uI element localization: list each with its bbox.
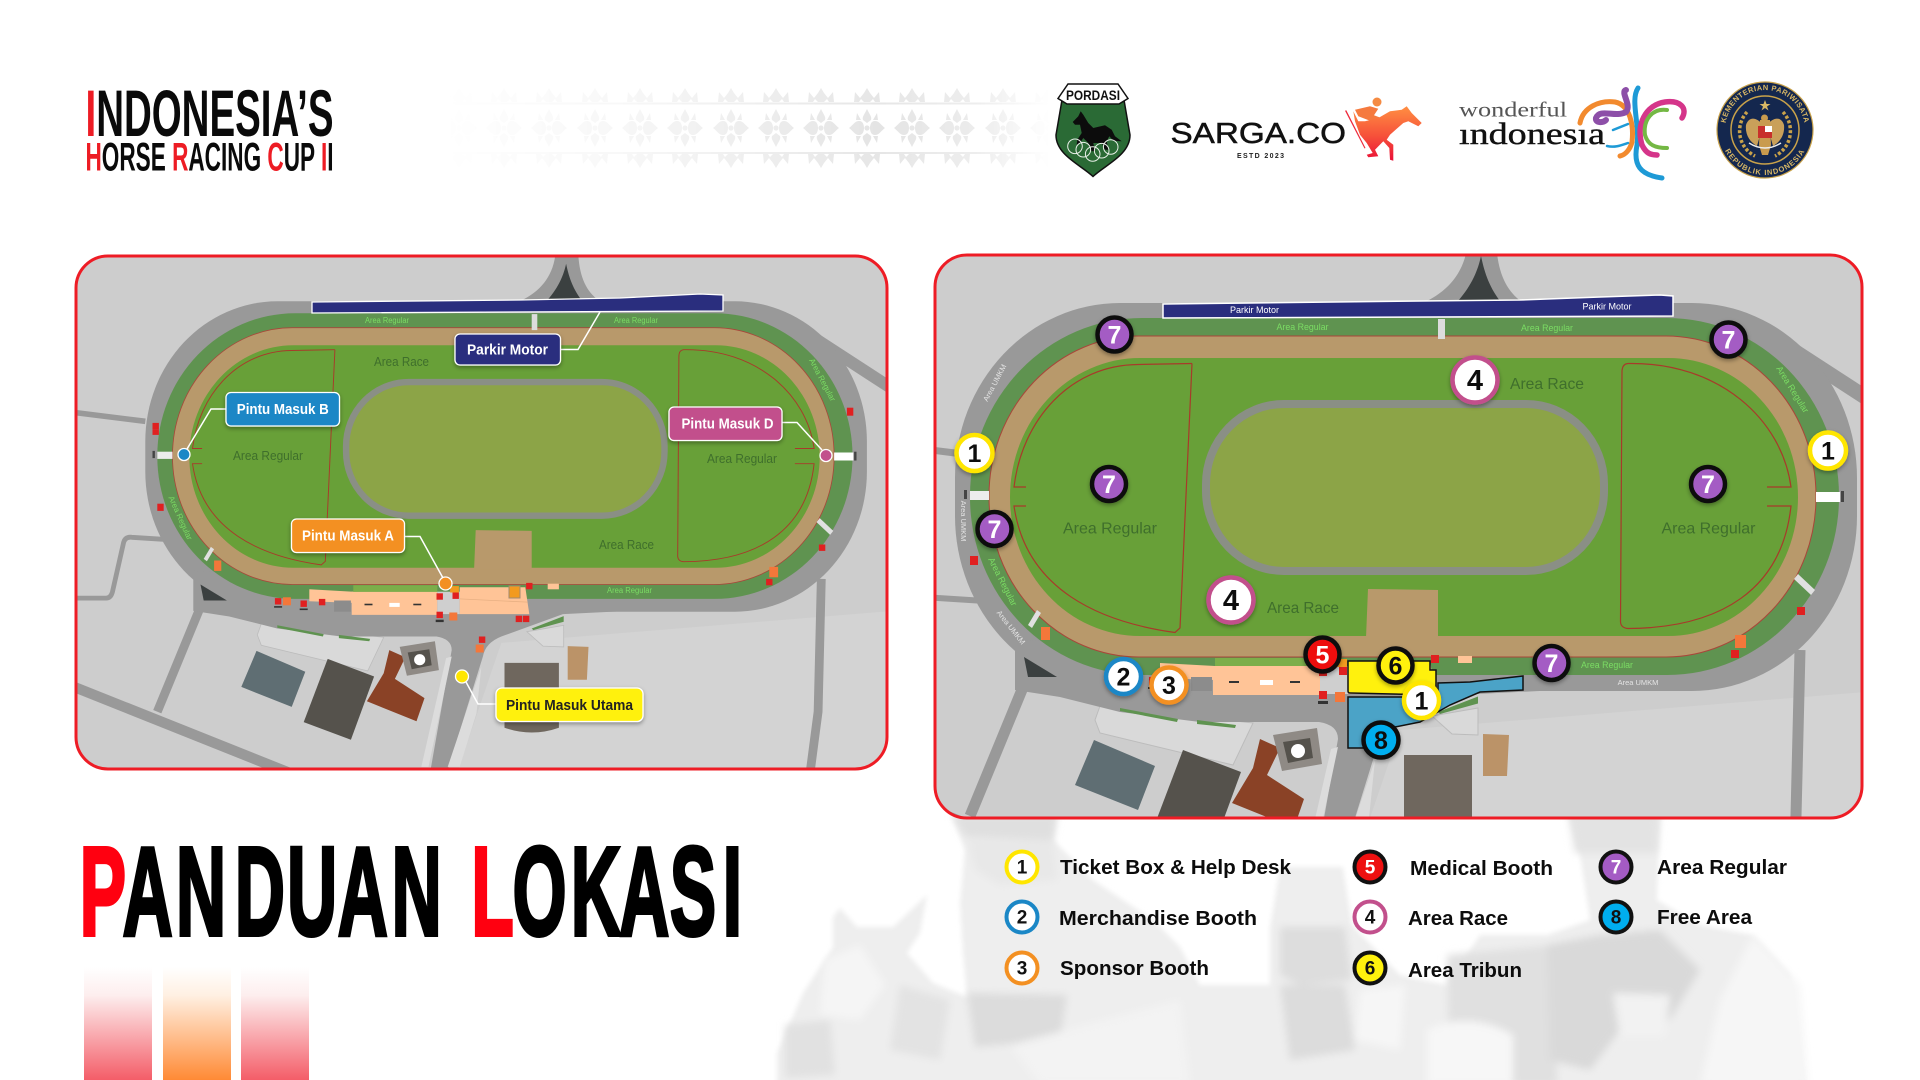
pin 4 top: 4 (1467, 365, 1483, 397)
logo: PORDASI shield: PORDASI (1066, 88, 1120, 103)
right panel: facility map (934, 254, 1864, 820)
map text: area names: Area UMKM (995, 609, 1027, 646)
pin 4 bottom: 4 (1223, 585, 1239, 617)
logo: SARGA.CO: ESTD 2023 (1237, 153, 1284, 160)
map text: area names: Area Regular (807, 357, 837, 403)
pin 5: 5 (1316, 642, 1330, 670)
pin 7 left band (978, 512, 1012, 546)
map text: area names (167, 316, 837, 595)
legend item 3 (1006, 952, 1209, 984)
pin 2 (1106, 659, 1141, 694)
logo: SARGA.CO: SARGA.CO (1170, 118, 1346, 150)
callout: Pintu Masuk B: Pintu Masuk B (237, 402, 329, 418)
legend item 2: Merchandise Booth (1059, 907, 1257, 930)
callout: Parkir Motor: Parkir Motor (467, 342, 548, 358)
logo: Kementerian Pariwisata seal: REPUBLIK INDONESIA (1725, 148, 1804, 175)
map text: area names: Area Regular (607, 586, 652, 595)
area tribun yellow (1348, 661, 1436, 695)
callout: Parkir Motor (455, 312, 600, 365)
map text: area names: Area UMKM (981, 363, 1008, 403)
map text: area names: Area Regular (1276, 322, 1329, 332)
map text: area names: Parkir Motor (1582, 302, 1632, 312)
logo: PORDASI shield (1056, 84, 1130, 176)
callout: Pintu Masuk B (178, 392, 340, 460)
map text: area names: Area Regular (233, 449, 303, 463)
map text: area names: Area Race (374, 355, 429, 369)
legend item 2: 2 (1017, 908, 1027, 928)
event logo: Indonesia's Horse Racing Cup II: INDONESIA’S (86, 76, 334, 150)
legend item 5 (1354, 852, 1553, 882)
map text: area names: Area Regular (707, 452, 777, 466)
callout: Pintu Masuk Utama (456, 670, 643, 722)
callout: Pintu Masuk D (669, 407, 832, 462)
decorative gradient bars (84, 967, 309, 1080)
map pins (956, 318, 1846, 758)
pin 1 left gate (956, 435, 992, 471)
legend (1006, 852, 1787, 984)
legend item 1 (1006, 852, 1292, 882)
legend item 5: Medical Booth (1410, 857, 1553, 880)
map text: area names: Area Race (1510, 376, 1584, 393)
right panel border (935, 255, 1862, 818)
map text: area names: Area Regular (986, 556, 1019, 608)
map text: area names: Area Regular (1662, 520, 1756, 538)
callout: Pintu Masuk A: Pintu Masuk A (302, 528, 394, 544)
callout: Pintu Masuk D: Pintu Masuk D (682, 416, 774, 432)
map text: area names: Area Race (1267, 600, 1339, 617)
logo: Kementerian Pariwisata seal (1716, 81, 1814, 179)
background jockey photo (777, 812, 1808, 1080)
pin 7 top right: 7 (1722, 326, 1735, 354)
header ornament band (628, 88, 1017, 168)
legend item 2 (1006, 902, 1257, 932)
pin 8: 8 (1374, 727, 1388, 755)
pin 7 right infield (1691, 467, 1725, 501)
legend item 8 (1600, 902, 1753, 932)
pin 7 top left: 7 (1108, 322, 1121, 350)
logo: SARGA.CO (1170, 98, 1422, 161)
pin 1 tribune (1404, 683, 1439, 718)
parking strip (1163, 295, 1673, 318)
map text: area names: Area Race (599, 538, 654, 552)
legend item 5: 5 (1365, 858, 1376, 878)
pin 4 bottom (1208, 578, 1254, 622)
legend item 3: 3 (1017, 958, 1027, 980)
logo: wonderful indonesia (1459, 88, 1684, 178)
left panel: entrance map (69, 248, 901, 784)
pin 6: 6 (1389, 652, 1402, 680)
pin 7 top left (1098, 318, 1132, 352)
pin 7 right infield: 7 (1701, 471, 1715, 499)
legend item 3: Sponsor Booth (1060, 957, 1209, 980)
pin 3: 3 (1162, 672, 1176, 700)
legend item 6: 6 (1365, 958, 1375, 980)
map text: area names: Area Regular (1063, 520, 1158, 538)
pin 2: 2 (1117, 664, 1130, 692)
map text: area names: Area UMKM (1618, 678, 1658, 687)
legend item 8: Free Area (1657, 906, 1753, 929)
legend item 1: 1 (1017, 858, 1028, 878)
map text: area names (959, 302, 1811, 687)
legend item 4 (1354, 902, 1508, 932)
pin 1 right gate (1810, 432, 1846, 468)
map text: area names: Area Regular (167, 495, 194, 542)
pin 8 (1364, 722, 1398, 758)
title: Panduan Lokasi: PANDUAN LOKASI (80, 821, 742, 962)
pin 7 bottom band: 7 (1545, 650, 1558, 678)
pin 3 (1152, 668, 1186, 702)
map text: area names: Area UMKM (959, 501, 968, 541)
pin 7 left infield (1092, 467, 1126, 501)
map text: area names: Area Regular (1521, 323, 1573, 333)
map text: area names: Area Regular (1581, 660, 1633, 670)
legend item 4: 4 (1365, 908, 1376, 928)
left panel border (76, 256, 887, 769)
pin 7 top right (1712, 322, 1746, 356)
map text: area names: Area Regular (365, 316, 409, 325)
logo: wonderful indonesia: ındonesıa (1459, 116, 1605, 151)
map text: area names: Area Regular (1774, 364, 1811, 415)
logo: Kementerian Pariwisata seal: KEMENTERIAN PARIWISATA (1720, 84, 1809, 123)
pin 1 left gate: 1 (968, 440, 982, 468)
pin 4 top (1452, 358, 1498, 402)
pin 7 bottom band (1534, 646, 1568, 680)
callout: Pintu Masuk A (292, 519, 452, 590)
pin 1 right gate: 1 (1821, 438, 1835, 466)
pin 6 (1378, 648, 1412, 682)
legend item 6: Area Tribun (1408, 959, 1522, 982)
pin 7 left infield: 7 (1102, 471, 1116, 499)
legend item 1: Ticket Box & Help Desk (1060, 856, 1292, 879)
map text: area names: Parkir Motor (1230, 305, 1279, 316)
pin 7 left band: 7 (988, 516, 1001, 544)
logo: wonderful indonesia: wonderful (1459, 98, 1567, 122)
callout: Pintu Masuk Utama: Pintu Masuk Utama (506, 698, 634, 714)
event logo: Indonesia's Horse Racing Cup II: HORSE RACING CUP II (86, 136, 334, 180)
legend item 6 (1354, 952, 1522, 984)
legend item 8: 8 (1611, 908, 1621, 928)
legend item 4: Area Race (1408, 907, 1508, 930)
event logo: Indonesia's Horse Racing Cup II (86, 76, 334, 180)
legend item 7 (1600, 852, 1787, 882)
free area blue (1348, 676, 1523, 748)
pin 1 tribune: 1 (1415, 688, 1429, 716)
pin 5 (1306, 638, 1340, 672)
map text: area names: Area Regular (614, 316, 658, 325)
legend item 7: 7 (1611, 858, 1621, 878)
legend item 7: Area Regular (1657, 856, 1787, 879)
